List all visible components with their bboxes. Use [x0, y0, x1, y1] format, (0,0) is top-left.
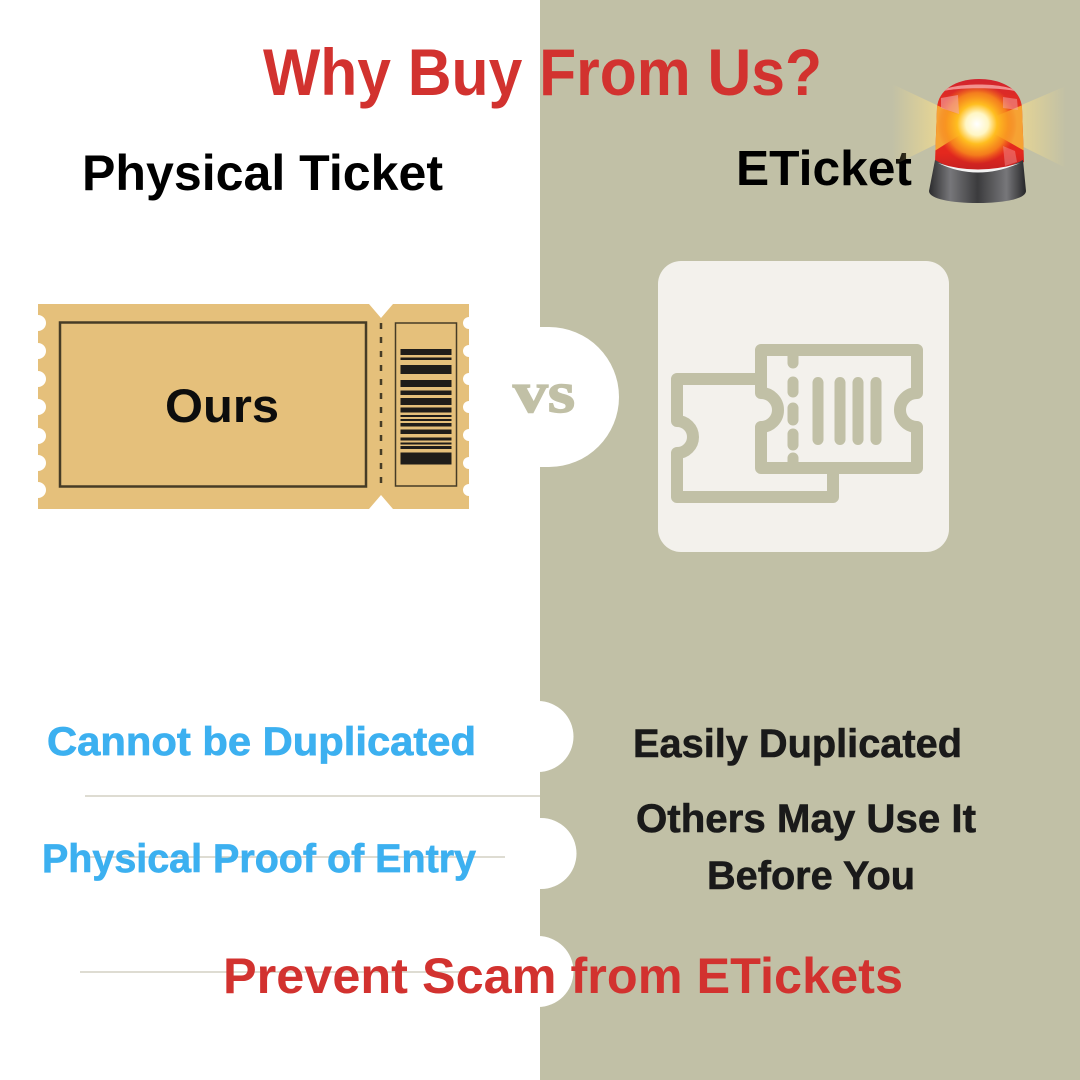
- benefit: physical proof of entry: Physical Proof of Entry: [42, 837, 477, 881]
- perforation line: [380, 323, 382, 487]
- heading: eticket: ETicket: [736, 142, 912, 196]
- vs badge: [513, 327, 619, 467]
- closing message: Prevent Scam from ETickets: [223, 948, 903, 1004]
- ticket perforation dashes: [788, 352, 798, 466]
- ticket barcode stripes: [818, 382, 876, 440]
- row tab: first comparison row: [530, 701, 574, 772]
- row tab: second comparison row: [530, 818, 576, 889]
- row tab: third comparison row: [530, 936, 574, 1007]
- divider lines: [80, 796, 540, 972]
- barcode: [400, 349, 452, 464]
- front ticket outline: [761, 350, 917, 468]
- ticket label: Ours: [165, 379, 279, 432]
- drawback: easily duplicated: Easily Duplicated: [633, 722, 962, 766]
- drawback: others may use it before you: Before You: [707, 854, 915, 898]
- physical ticket illustration: [30, 304, 477, 509]
- title: Why Buy From Us?: [263, 35, 822, 109]
- icon: red siren alarm: [896, 79, 1055, 203]
- background: left white panel: [0, 0, 540, 1080]
- drawback: others may use it before you: [636, 797, 976, 898]
- ticket main frame: [60, 322, 366, 486]
- ticket body with notches and perforations: [38, 304, 469, 509]
- drawback: others may use it before you: Others May Use It: [636, 797, 976, 841]
- vs badge: vs: [513, 360, 575, 425]
- background: right olive panel: [540, 0, 1080, 1080]
- benefit: cannot be duplicated: Cannot be Duplicated: [47, 720, 476, 764]
- ticket stub frame: [396, 323, 456, 486]
- eticket icon card: [658, 261, 949, 552]
- heading: physical ticket: Physical Ticket: [82, 145, 443, 201]
- back ticket outline: [677, 379, 833, 497]
